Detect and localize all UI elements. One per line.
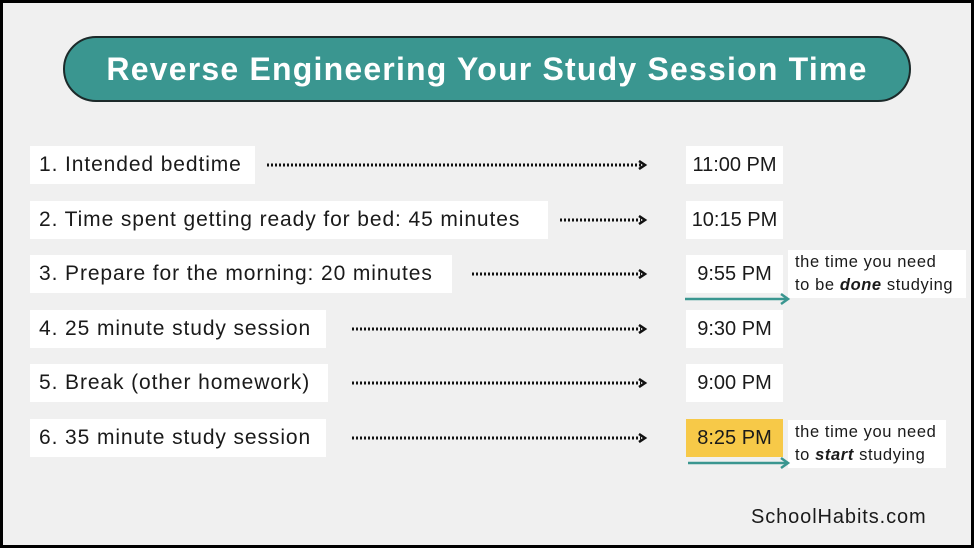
row 5 label: 5. Break (other homework): [39, 371, 310, 394]
teal arrow 1: [685, 293, 790, 305]
time 2: [686, 201, 783, 239]
row 6 label: [30, 419, 326, 457]
time 6 highlighted: [686, 419, 783, 457]
callout: start: the time you need: [795, 423, 936, 441]
row 1 label: [30, 146, 255, 184]
time 4: [686, 310, 783, 348]
row 2 label: [30, 201, 548, 239]
time 5: [686, 364, 783, 402]
arrow row 4: [352, 324, 648, 334]
time 3: 9:55 PM: [697, 263, 772, 285]
footer: SchoolHabits.com: [751, 506, 927, 528]
row 5 label: [30, 364, 328, 402]
time 1: 11:00 PM: [692, 154, 777, 176]
arrow row 2: [560, 215, 648, 225]
row 4 label: [30, 310, 326, 348]
time 3: [686, 255, 783, 293]
row 4 label: 4. 25 minute study session: [39, 317, 311, 340]
time 2: 10:15 PM: [692, 209, 777, 231]
callout: start: to start studying: [795, 446, 925, 464]
time 5: 9:00 PM: [697, 372, 772, 394]
arrow row 3: [472, 269, 648, 279]
time 1: [686, 146, 783, 184]
callout: start: [788, 420, 946, 468]
arrow row 5: [352, 378, 648, 388]
time 6 highlighted: 8:25 PM: [697, 427, 772, 449]
arrow row 6: [352, 433, 648, 443]
teal arrow 2: [688, 457, 790, 469]
row 3 label: [30, 255, 452, 293]
row 6 label: 6. 35 minute study session: [39, 426, 311, 449]
row 3 label: 3. Prepare for the morning: 20 minutes: [39, 262, 433, 285]
callout: done: to be done studying: [795, 276, 953, 294]
row 1 label: 1. Intended bedtime: [39, 153, 242, 176]
time 4: 9:30 PM: [697, 318, 772, 340]
arrow row 1: [267, 160, 648, 170]
callout: done: the time you need: [795, 253, 936, 271]
row 2 label: 2. Time spent getting ready for bed: 45 minutes: [39, 208, 520, 231]
title: Reverse Engineering Your Study Session Time: [106, 51, 868, 87]
callout: done: [788, 250, 966, 298]
title: [63, 36, 911, 102]
